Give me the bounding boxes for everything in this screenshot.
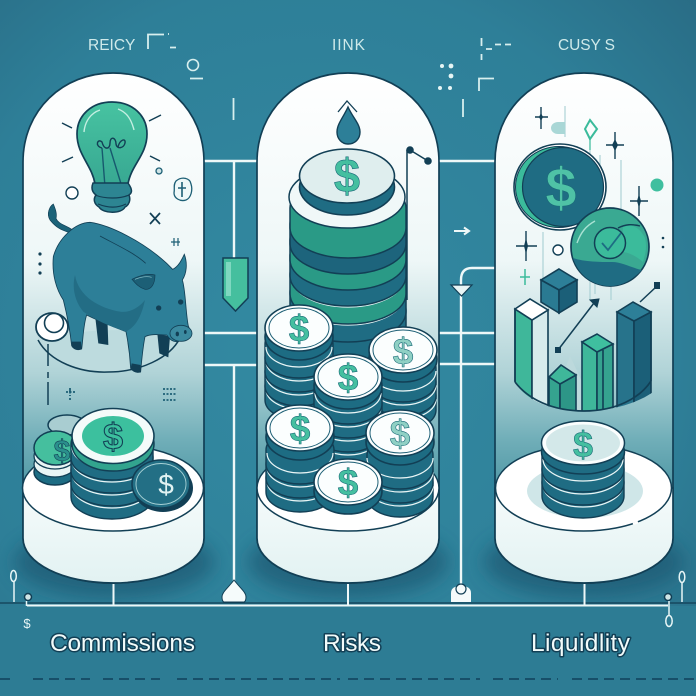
bar chart [515,299,651,420]
icon: bulb rays and marks [38,115,192,275]
coin: tall stack [289,149,406,360]
coin stack: E [366,410,434,517]
icon: dollar coin [514,144,606,230]
coin: tilted dark coin: $ [158,469,174,500]
label: Commissions: Commissions [50,630,195,657]
coin: left small stack [34,431,78,485]
coin stack: B: $ [393,331,414,372]
icon: funnel marker [451,285,472,296]
coin stack: A: $ [289,308,310,349]
coin stack: C: $ [338,357,359,398]
icon: node link [406,146,432,300]
panel: commissions [22,73,204,583]
icon: light bulb [77,102,147,212]
left timeline marks: $ [23,616,31,631]
coin stack: B [369,327,437,430]
panel: liquidity [495,73,673,583]
heading: CUSY S [438,37,615,117]
icon: check badge [571,208,649,286]
baseline timeline [0,584,696,696]
coin: main coin stack: $ [103,416,123,457]
base: commissions pedestal [22,445,204,583]
coin: F [314,459,382,514]
icon: piggy coin [36,313,68,341]
coin: back coin [48,415,86,435]
coin: tilted dark coin [132,460,193,512]
connector node: teardrop [222,580,246,602]
arrow: chart trend right [640,282,660,302]
label: Liquidlity: Liquidlity [531,630,631,657]
right timeline marks [664,572,685,626]
coin stack: liquidity [542,421,624,518]
base: risks pedestal [257,445,439,583]
arrow: small right arrow [454,228,469,234]
icon: shield marker [223,258,248,311]
coin stack: C [314,354,382,466]
label: Risks: Risks [323,630,381,657]
left timeline marks [11,570,31,631]
coin: F: $ [338,462,359,503]
dashed rule [0,678,696,680]
heading: REICY [88,34,234,120]
connector node: socket [451,584,471,602]
icon: water drop [337,101,360,144]
base: liquidity pedestal [495,445,673,583]
decorative sparkles [516,106,664,300]
coin: left small stack: $ [54,435,71,468]
coin: main coin stack [71,408,154,519]
coin stack: A [265,305,333,420]
connectors between panels [204,161,495,586]
arrow: chart trend left [555,299,599,353]
panel: risks [257,73,439,583]
coin stack: liquidity: $ [573,424,593,465]
heading: CUSY S: CUSY S [558,37,615,54]
heading: IINK: IINK [332,37,366,54]
icon: piggy bank [48,204,192,373]
icon: dollar coin: $ [545,156,577,219]
coin stack: D [266,405,334,512]
coin stack: D: $ [290,408,311,449]
ground ellipse [38,330,180,405]
heading: REICY: REICY [88,37,135,54]
icon: cube [541,269,577,313]
panel shadows [14,526,684,598]
marks above coins [66,388,176,400]
coin stack: E: $ [390,413,411,454]
coin: tall stack: $ [334,149,360,202]
